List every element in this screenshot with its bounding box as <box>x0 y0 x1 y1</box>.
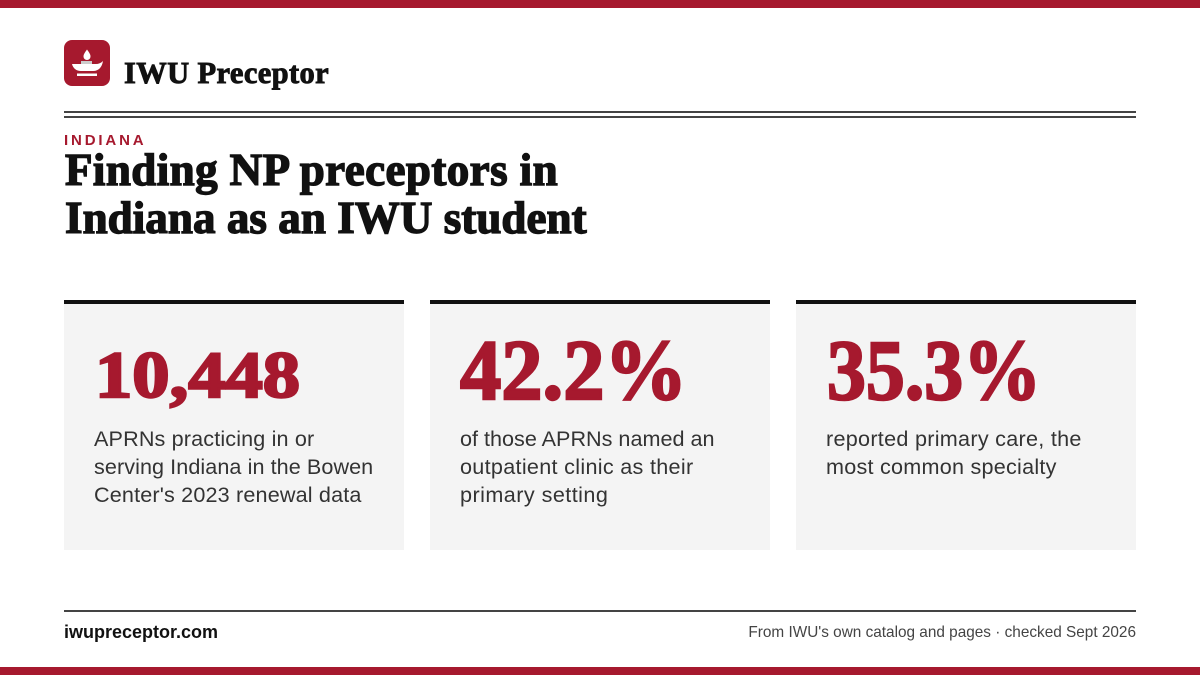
title: Indiana as an IWU student <box>65 193 587 243</box>
panel: outpatient share <box>430 300 770 550</box>
title: Finding NP preceptors in <box>65 145 558 195</box>
top bar <box>0 0 1200 8</box>
description: most common specialty <box>826 454 1057 479</box>
description: serving Indiana in the Bowen <box>94 454 373 479</box>
footer rule <box>64 610 1136 612</box>
bottom bar <box>0 667 1200 675</box>
description <box>94 426 373 507</box>
stat: 35.3%: 35.3% <box>827 322 1041 418</box>
description: primary setting <box>460 482 608 507</box>
footer source: From IWU's own catalog and pages · checked Sept 2026 <box>748 624 1136 641</box>
eyebrow: INDIANA <box>64 132 146 149</box>
panel: APRN count <box>64 300 404 550</box>
logo <box>64 40 110 86</box>
stat: 42.2%: 42.2% <box>460 322 687 418</box>
description <box>460 426 714 507</box>
description: Center's 2023 renewal data <box>94 482 362 507</box>
header double rule <box>64 111 1136 118</box>
stat: 10,448: 10,448 <box>95 339 300 412</box>
description: of those APRNs named an <box>460 426 714 451</box>
panel: primary care share <box>796 300 1136 550</box>
description <box>826 426 1082 479</box>
description: outpatient clinic as their <box>460 454 693 479</box>
title <box>65 145 588 243</box>
description: APRNs practicing in or <box>94 426 314 451</box>
brand name: IWU Preceptor <box>124 56 329 90</box>
footer site: iwupreceptor.com <box>64 622 218 642</box>
description: reported primary care, the <box>826 426 1082 451</box>
